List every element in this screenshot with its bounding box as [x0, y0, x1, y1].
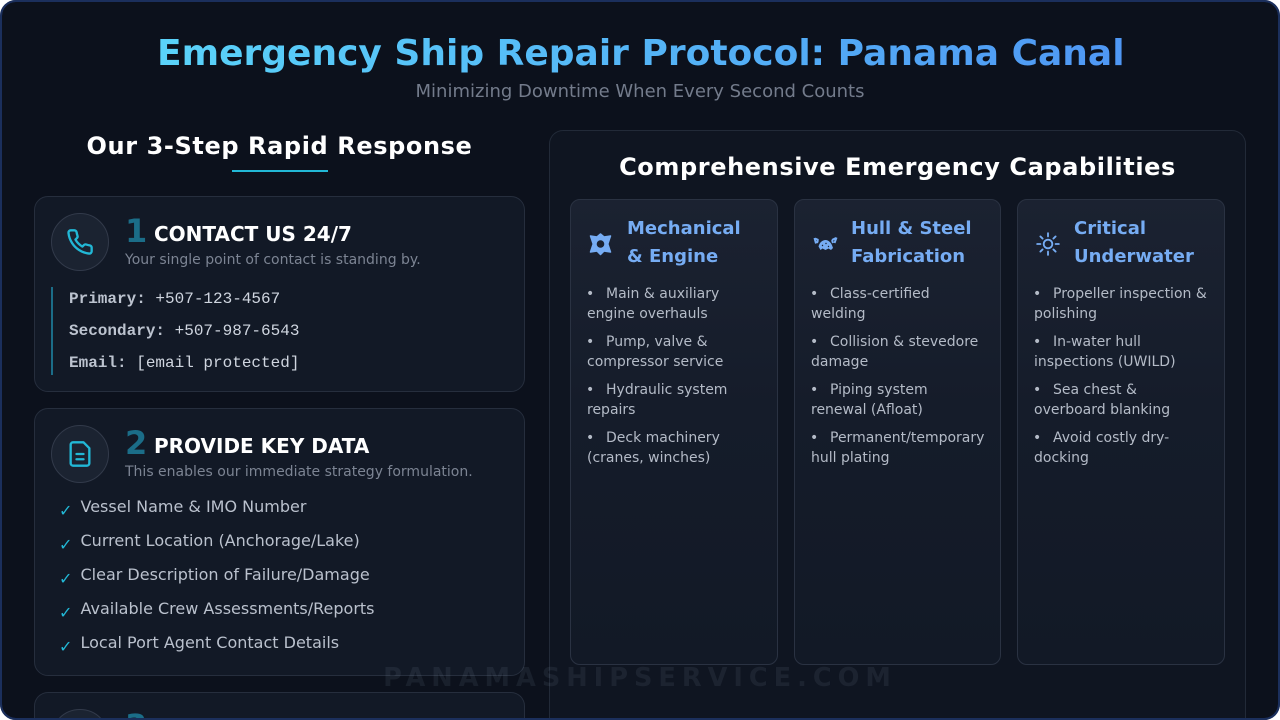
- underwater title: Underwater: [1074, 246, 1194, 267]
- step 1 heading: CONTACT US 24/7: [154, 222, 352, 246]
- column: mechanical: •: [586, 382, 594, 398]
- mechanical title: Mechanical: [627, 218, 741, 239]
- underwater title: Critical: [1074, 218, 1146, 239]
- icon: phone: [51, 213, 109, 271]
- icon: sun: [1036, 232, 1060, 256]
- step 2 subtitle: This enables our immediate strategy formulation.: [125, 464, 473, 480]
- subtitle: Minimizing Downtime When Every Second Counts: [416, 81, 864, 102]
- checklist: ✓: [59, 501, 72, 520]
- mechanical title: & Engine: [627, 246, 718, 267]
- title: Emergency Ship Repair Protocol: Panama Canal: [157, 33, 1125, 74]
- column: underwater: overboard blanking: [1034, 402, 1170, 418]
- column: mechanical: [570, 199, 778, 665]
- contact accent bar: [51, 287, 53, 375]
- heading: capabilities: Comprehensive Emergency Capabilities: [619, 153, 1176, 181]
- column: mechanical: Hydraulic system: [606, 382, 727, 398]
- column: mechanical: Deck machinery: [606, 430, 720, 446]
- checklist: Available Crew Assessments/Reports: [80, 599, 374, 618]
- email: Email: [email protected]: [69, 354, 299, 372]
- hull list: •: [810, 286, 818, 302]
- panel: step 1 contact: [34, 196, 525, 392]
- column: mechanical: •: [586, 334, 594, 350]
- column: hull: Piping system: [830, 382, 928, 398]
- column: mechanical: repairs: [587, 402, 635, 418]
- icon: document: [51, 425, 109, 483]
- step number 2: 2: [125, 424, 147, 462]
- column: underwater: inspections (UWILD): [1034, 354, 1176, 370]
- underwater list: Propeller inspection &: [1053, 286, 1207, 302]
- hull list: welding: [811, 306, 866, 322]
- watermark: PANAMASHIPSERVICE.COM: [383, 663, 897, 693]
- heading: rapid response: Our 3-Step Rapid Response: [87, 132, 472, 160]
- column: underwater: •: [1033, 382, 1041, 398]
- panel: capabilities: [549, 130, 1246, 718]
- secondary phone: Secondary: +507-987-6543: [69, 322, 299, 340]
- column: hull: hull plating: [811, 450, 889, 466]
- mechanical list: Main & auxiliary: [606, 286, 719, 302]
- column: underwater: Avoid costly dry-: [1053, 430, 1169, 446]
- checklist: ✓: [59, 535, 72, 554]
- checklist: ✓: [59, 637, 72, 656]
- checklist: Clear Description of Failure/Damage: [80, 565, 370, 584]
- column: mechanical: compressor service: [587, 354, 723, 370]
- checklist: Vessel Name & IMO Number: [80, 497, 306, 516]
- mechanical title: [627, 218, 741, 267]
- checklist: ✓: [59, 603, 72, 622]
- hull title: Hull & Steel: [851, 218, 972, 239]
- icon: gear: [590, 233, 612, 256]
- hull list: Class-certified: [830, 286, 930, 302]
- column: hull: •: [810, 430, 818, 446]
- column: underwater: In-water hull: [1053, 334, 1141, 350]
- underwater title: [1074, 218, 1194, 267]
- heading underline: [232, 170, 328, 172]
- step 2 heading: PROVIDE KEY DATA: [154, 434, 369, 458]
- checklist: [59, 497, 374, 656]
- panel: step 3 (cut off): [34, 692, 525, 718]
- column: hull: damage: [811, 354, 868, 370]
- checklist: Current Location (Anchorage/Lake): [80, 531, 360, 550]
- hull list: [810, 286, 930, 322]
- column: hull: •: [810, 382, 818, 398]
- hull title: [851, 218, 972, 267]
- column: mechanical: Pump, valve &: [606, 334, 708, 350]
- checklist: Local Port Agent Contact Details: [80, 633, 339, 652]
- mechanical list: engine overhauls: [587, 306, 708, 322]
- column: hull: •: [810, 334, 818, 350]
- step number 1: 1: [125, 212, 147, 250]
- column: hull: Collision & stevedore: [830, 334, 978, 350]
- column: underwater: •: [1033, 430, 1041, 446]
- column: hull: renewal (Afloat): [811, 402, 923, 418]
- panel: step 2 key data: [34, 408, 525, 676]
- column: underwater: docking: [1034, 450, 1089, 466]
- column: underwater: [1017, 199, 1225, 665]
- column: mechanical: (cranes, winches): [587, 450, 710, 466]
- column: underwater: Sea chest &: [1053, 382, 1137, 398]
- mechanical list: •: [586, 286, 594, 302]
- icon circle 3: [59, 709, 101, 718]
- column: mechanical: •: [586, 430, 594, 446]
- column: hull: [794, 199, 1001, 665]
- column: underwater: •: [1033, 334, 1041, 350]
- underwater list: •: [1033, 286, 1041, 302]
- primary phone: Primary: +507-123-4567: [69, 290, 280, 308]
- checklist: ✓: [59, 569, 72, 588]
- step 1 subtitle: Your single point of contact is standing by.: [125, 252, 421, 268]
- mechanical list: [586, 286, 719, 322]
- icon: hull welding: [814, 237, 838, 250]
- column: hull: Permanent/temporary: [830, 430, 984, 446]
- hull title: Fabrication: [851, 246, 965, 267]
- underwater list: [1033, 286, 1207, 322]
- underwater list: polishing: [1034, 306, 1097, 322]
